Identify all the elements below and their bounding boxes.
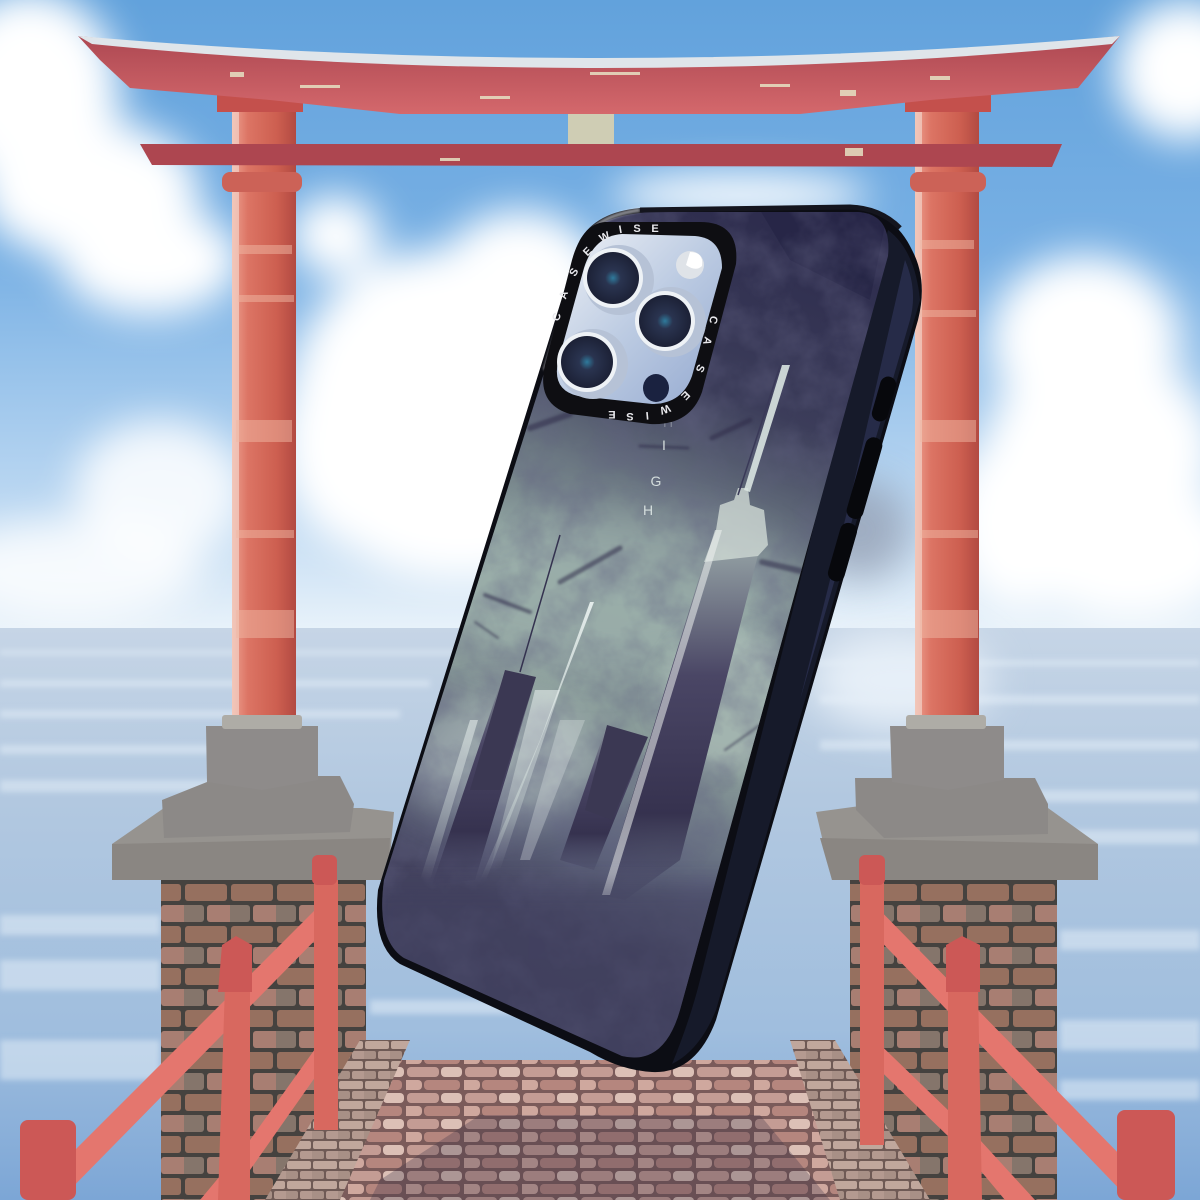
artwork: paper creases: [475, 414, 805, 750]
left railing: [20, 855, 338, 1200]
artwork: middle light beams: [480, 602, 594, 880]
phone: artwork: [370, 200, 900, 1075]
lens: top: [583, 245, 654, 315]
bump lettering: CASEWISE: A: [557, 289, 571, 301]
left pillar: [217, 84, 303, 718]
bridge floor: [265, 1040, 930, 1200]
phone: top edge: [640, 207, 900, 228]
right railing: [859, 855, 1175, 1200]
bump lettering: CASEWISE: S: [693, 362, 707, 374]
bump lettering: CASEWISE: W: [597, 229, 613, 245]
bump lettering: CASEWISE: C: [706, 314, 720, 325]
lens: right: [635, 287, 706, 357]
bump lettering: CASEWISE: I: [618, 224, 623, 236]
artwork: left tower: [420, 535, 560, 885]
artwork: letters HIGH: H: [663, 414, 673, 430]
bump lettering: CASEWISE: E: [581, 245, 595, 259]
sensor: [643, 374, 669, 402]
left stone base: [112, 715, 394, 1200]
torii gate: [78, 36, 1120, 718]
clouds: [0, 0, 1200, 620]
artwork: paper texture: [370, 200, 900, 1070]
bump lettering: CASEWISE: [550, 223, 720, 422]
flash: [676, 251, 704, 279]
right stone base: [816, 715, 1098, 1200]
bump lettering: CASEWISE: S: [567, 266, 581, 279]
bump lettering: CASEWISE: E: [608, 408, 616, 420]
phone: left edge glare: [545, 210, 640, 370]
lens: bottom: [557, 329, 628, 399]
lintel: lower beam: [140, 104, 1062, 167]
bump lettering: CASEWISE: S: [633, 223, 641, 235]
phone: case body: [377, 206, 922, 1072]
artwork: letters HIGH: H: [643, 502, 653, 518]
artwork: bottom fog: [416, 874, 715, 1056]
camera bump: [543, 222, 736, 424]
phone: side buttons: [826, 375, 898, 583]
artwork: letters HIGH: [644, 422, 672, 515]
bump lettering: CASEWISE: S: [626, 410, 634, 422]
artwork: letters HIGH: G: [651, 473, 661, 489]
bump lettering: CASEWISE: E: [651, 223, 659, 235]
artwork: letters HIGH: I: [662, 437, 666, 453]
lintel: top beam: [78, 36, 1120, 161]
camera plate: [557, 234, 722, 404]
background: sky: [0, 0, 1200, 630]
bump lettering: CASEWISE: A: [700, 335, 714, 346]
bump lettering: CASEWISE: E: [678, 388, 692, 402]
right pillar: [905, 84, 991, 718]
phone: [370, 200, 922, 1075]
artwork: tall skyscraper: [602, 365, 790, 900]
bump lettering: CASEWISE: C: [550, 311, 564, 323]
bump lettering: CASEWISE: I: [645, 409, 649, 421]
background: sea: [0, 628, 1200, 1200]
artwork: right tower: [560, 725, 648, 870]
bump lettering: CASEWISE: W: [658, 401, 672, 416]
